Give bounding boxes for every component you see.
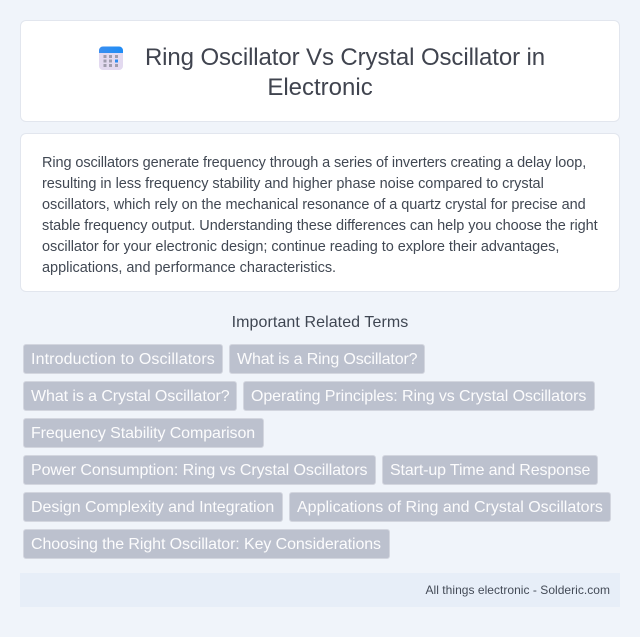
title (145, 44, 545, 101)
intro paragraph: stable frequency output. Understanding these differences can help you choose the right (42, 218, 598, 234)
intro paragraph: applications, and performance characteristics. (42, 260, 336, 276)
tag (289, 492, 611, 522)
tag: Frequency Stability Comparison (31, 425, 255, 442)
tag (23, 529, 390, 559)
tag: Power Consumption: Ring vs Crystal Oscillators (31, 462, 367, 479)
tag (382, 455, 598, 485)
tag (23, 492, 283, 522)
intro paragraph: Ring oscillators generate frequency through a series of inverters creating a delay loop, (42, 155, 586, 171)
tag: Applications of Ring and Crystal Oscillators (297, 499, 603, 516)
tag: Start-up Time and Response (390, 462, 590, 479)
tag (243, 381, 595, 411)
title: Ring Oscillator Vs Crystal Oscillator in (145, 44, 545, 71)
icon: calendar (99, 46, 123, 70)
tag (23, 344, 222, 374)
footer (20, 573, 620, 607)
footer text: All things electronic - Solderic.com (426, 583, 610, 597)
tag (23, 455, 376, 485)
tag: Choosing the Right Oscillator: Key Considerations (31, 536, 381, 553)
tag list (23, 344, 611, 559)
panel: title card (20, 20, 620, 122)
tag (23, 381, 237, 411)
tag: Design Complexity and Integration (31, 499, 274, 516)
tag: Introduction to Oscillators (31, 351, 215, 368)
intro paragraph: resulting in less frequency stability and higher phase noise compared to crystal (42, 176, 544, 192)
tag: What is a Ring Oscillator? (237, 351, 417, 368)
intro paragraph (42, 155, 598, 276)
tag (229, 344, 425, 374)
tag: Operating Principles: Ring vs Crystal Oscillators (251, 388, 586, 405)
tag (23, 418, 264, 448)
title: Electronic (267, 74, 373, 101)
intro paragraph: oscillator for your electronic design; continue reading to explore their advantages, (42, 239, 559, 255)
tag: What is a Crystal Oscillator? (31, 388, 230, 405)
intro paragraph: oscillators, which rely on the mechanical resonance of a quartz crystal for precise and (42, 197, 586, 213)
heading: related terms: Important Related Terms (232, 314, 408, 331)
panel: intro text (20, 133, 620, 292)
